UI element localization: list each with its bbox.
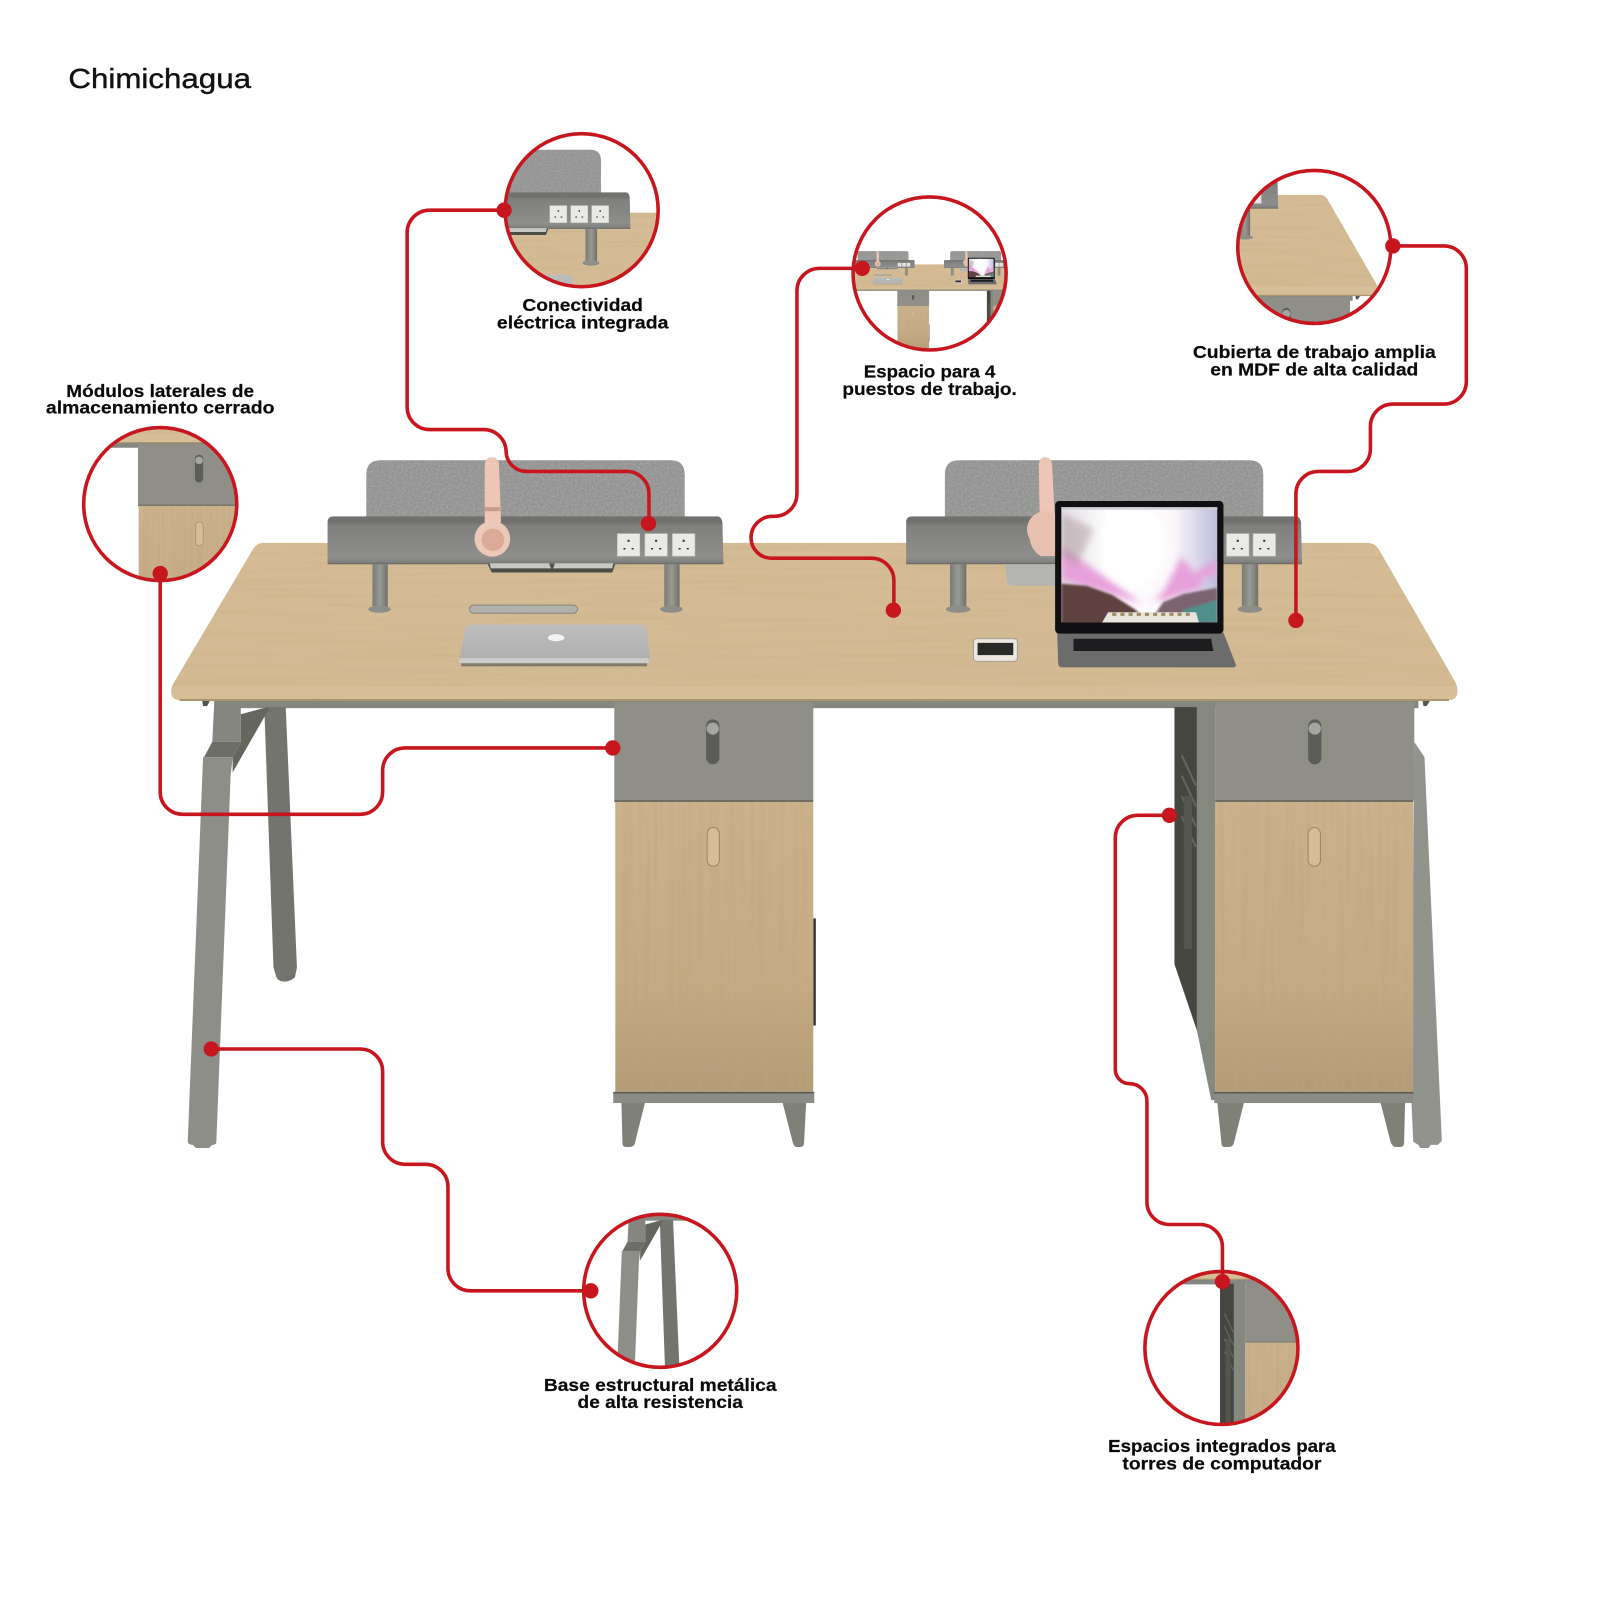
callout: Espacio para 4 puestos [826,197,1032,361]
open notebook [488,563,615,572]
label: Base estructural: de alta resistencia [578,1392,744,1412]
wood desktop [171,543,1457,706]
second closed laptop behind [1005,564,1055,586]
title: Chimichagua [68,63,252,94]
magnified sockets [211,147,1188,672]
laptop wallpaper [1061,505,1217,624]
label: Espacio para 4 puestos: Espacio para 4 [864,362,995,382]
desk illustration [171,457,1457,1148]
label: Espacios para torres [1108,1436,1337,1473]
connector: base [204,1041,598,1298]
sockets on right rail [1227,534,1276,556]
label: Cubierta de trabajo [1193,342,1437,380]
label: Conectividad eléctrica integrada [497,295,670,333]
headphones right [1027,457,1057,556]
callout: Cubierta de trabajo [554,140,1391,582]
ring [584,1214,737,1367]
ring [853,197,1006,350]
ring [505,134,658,287]
cable tray [469,605,578,613]
label: Base estructural [544,1375,778,1412]
open laptop [1055,501,1236,667]
label: Cubierta de trabajo: Cubierta de trabajo amplia [1193,342,1437,362]
ring [1145,1271,1298,1424]
connector: módulos [153,566,620,814]
label: Base estructural: Base estructural metálica [544,1375,778,1395]
label: Espacios para torres: Espacios integrados para [1108,1436,1337,1456]
connector: cubierta [1288,238,1466,628]
magnified tower space [598,1129,1395,1557]
left rear leg [264,707,297,982]
magnified desktop corner [554,140,1378,582]
magnified legs [602,1065,1400,1493]
sockets on left rail [617,534,695,556]
connector: espacio [751,261,901,618]
label: Espacio para 4 puestos [842,362,1017,399]
label: Espacio para 4 puestos: puestos de trabajo. [842,379,1017,399]
right cabinet [1214,702,1414,1147]
headphones left [474,457,510,557]
left privacy screen [328,460,723,564]
magnified cabinet [0,292,661,720]
phone [973,639,1017,661]
right cabinet side with tower space [1174,701,1215,1100]
label: Cubierta de trabajo: en MDF de alta calidad [1210,360,1418,380]
callout: Base estructural [584,1065,1400,1493]
frame bar under the top [214,700,1418,708]
closed laptop [459,624,650,666]
left front leg [188,702,269,1148]
label: Módulos laterales [46,381,275,417]
right leg [1411,742,1442,1148]
callout: Espacios para torres [598,1129,1395,1557]
ring [84,428,237,581]
label: Espacios para torres: torres de computador [1122,1453,1321,1473]
label: Módulos laterales: almacenamiento cerrado [46,397,275,417]
connector: conectividad [407,203,656,531]
label: Módulos laterales: Módulos laterales de [66,381,254,401]
callout: Módulos laterales [0,292,661,720]
label: Conectividad eléctrica integrada: Conectividad [522,295,643,315]
posts of the right screen [946,564,1262,613]
ring [1238,170,1391,323]
left cabinet [613,702,816,1147]
right privacy screen [906,460,1302,564]
label: Conectividad eléctrica integrada: eléctrica integrada [497,313,670,333]
callout: Conectividad eléctrica integrada [211,134,1188,672]
posts of the left screen [368,564,683,613]
miniature desk [826,251,1032,361]
connector: espacios torres [1115,808,1230,1289]
